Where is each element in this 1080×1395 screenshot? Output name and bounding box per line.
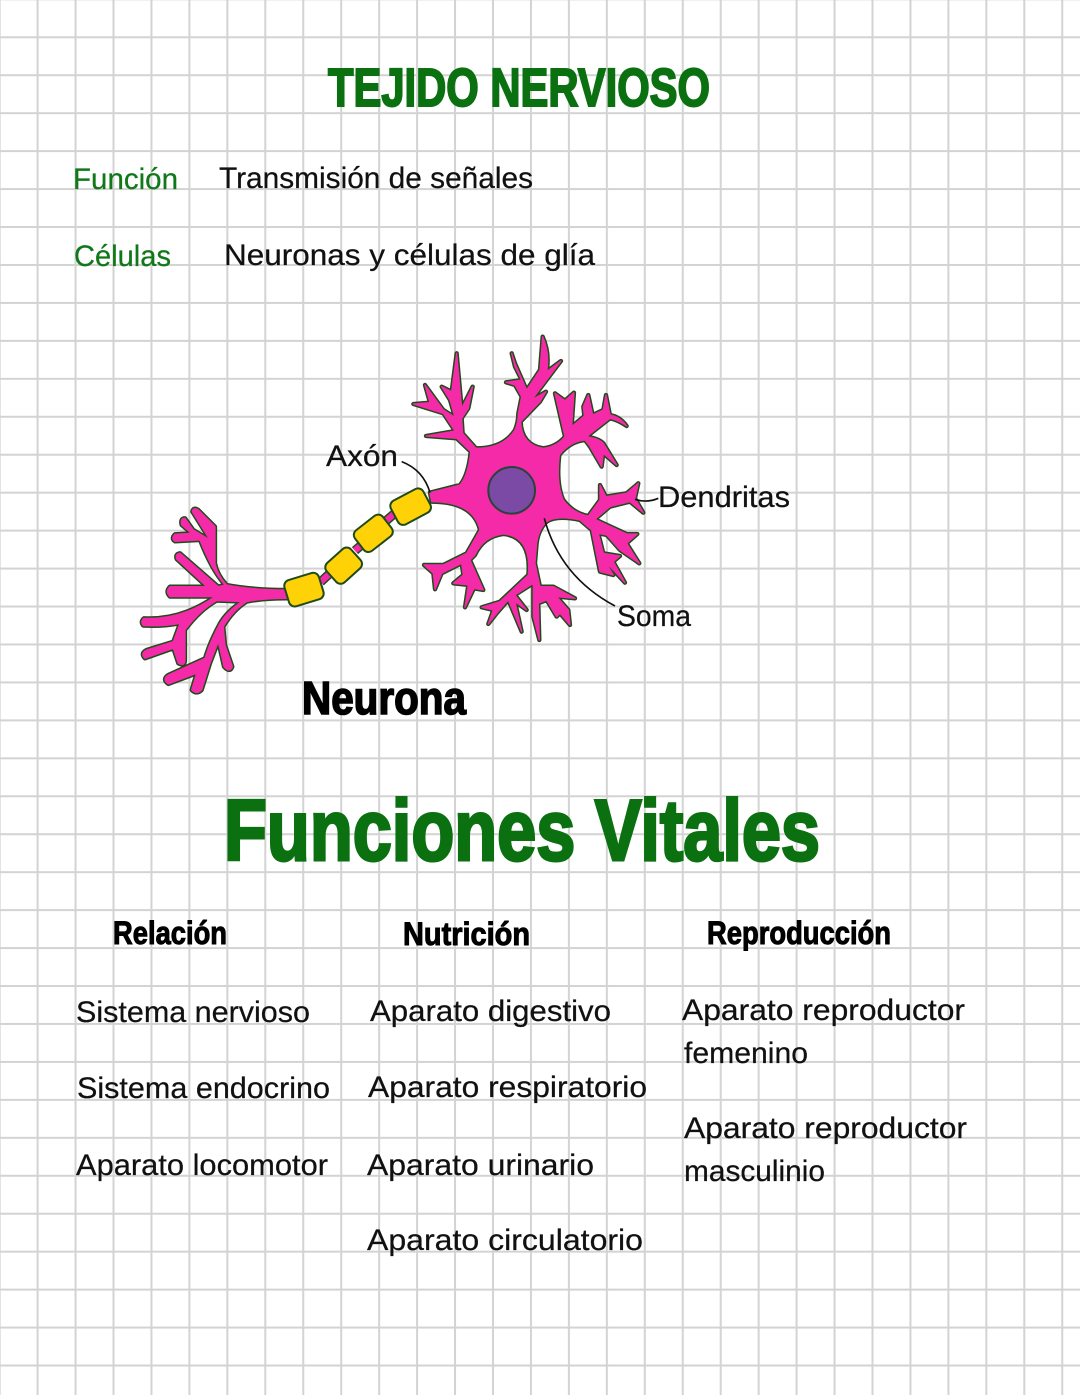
item: Aparato digestivo <box>370 995 611 1028</box>
Dendritas leader line <box>635 498 658 501</box>
label: Dendritas: Dendritas <box>658 481 790 514</box>
soma and dendrites <box>402 337 658 640</box>
diagram: neuron <box>142 337 658 692</box>
title: Tejido nervioso: TEJIDO NERVIOSO <box>328 58 710 118</box>
text: Transmisión de señales: Transmisión de señales <box>219 162 533 195</box>
label: Axón: Axón <box>326 440 398 473</box>
item: Sistema endocrino <box>77 1072 330 1105</box>
item: masculinio <box>684 1155 825 1188</box>
item: Sistema nervioso <box>76 996 310 1029</box>
item: Aparato circulatorio <box>367 1224 643 1257</box>
myelin sheath segments <box>283 486 433 608</box>
column heading: Relación <box>113 915 227 951</box>
myelin connectors <box>321 514 394 582</box>
column: Nutrición <box>367 916 647 1257</box>
Axon leader line <box>402 462 430 493</box>
column heading: Nutrición <box>403 916 530 952</box>
label: Células: Células <box>74 240 171 273</box>
item: femenino <box>684 1037 808 1070</box>
heading: Funciones Vitales: Funciones Vitales <box>224 783 820 879</box>
column: Reproducción <box>682 915 967 1188</box>
column: Relación <box>76 915 330 1182</box>
item: Aparato reproductor <box>684 1112 967 1145</box>
item: Aparato urinario <box>367 1149 594 1182</box>
column heading: Reproducción <box>707 915 891 951</box>
axon terminal branches <box>142 486 433 692</box>
diagram caption: Neurona: Neurona <box>302 672 466 724</box>
item: Aparato locomotor <box>76 1149 328 1182</box>
nucleus <box>488 467 535 514</box>
Soma leader line <box>544 518 615 606</box>
label: Función: Función <box>73 163 178 196</box>
item: Aparato respiratorio <box>368 1071 647 1104</box>
item: Aparato reproductor <box>682 994 965 1027</box>
label: Soma: Soma <box>617 600 691 633</box>
text: Neuronas y células de glía: Neuronas y células de glía <box>224 239 595 272</box>
